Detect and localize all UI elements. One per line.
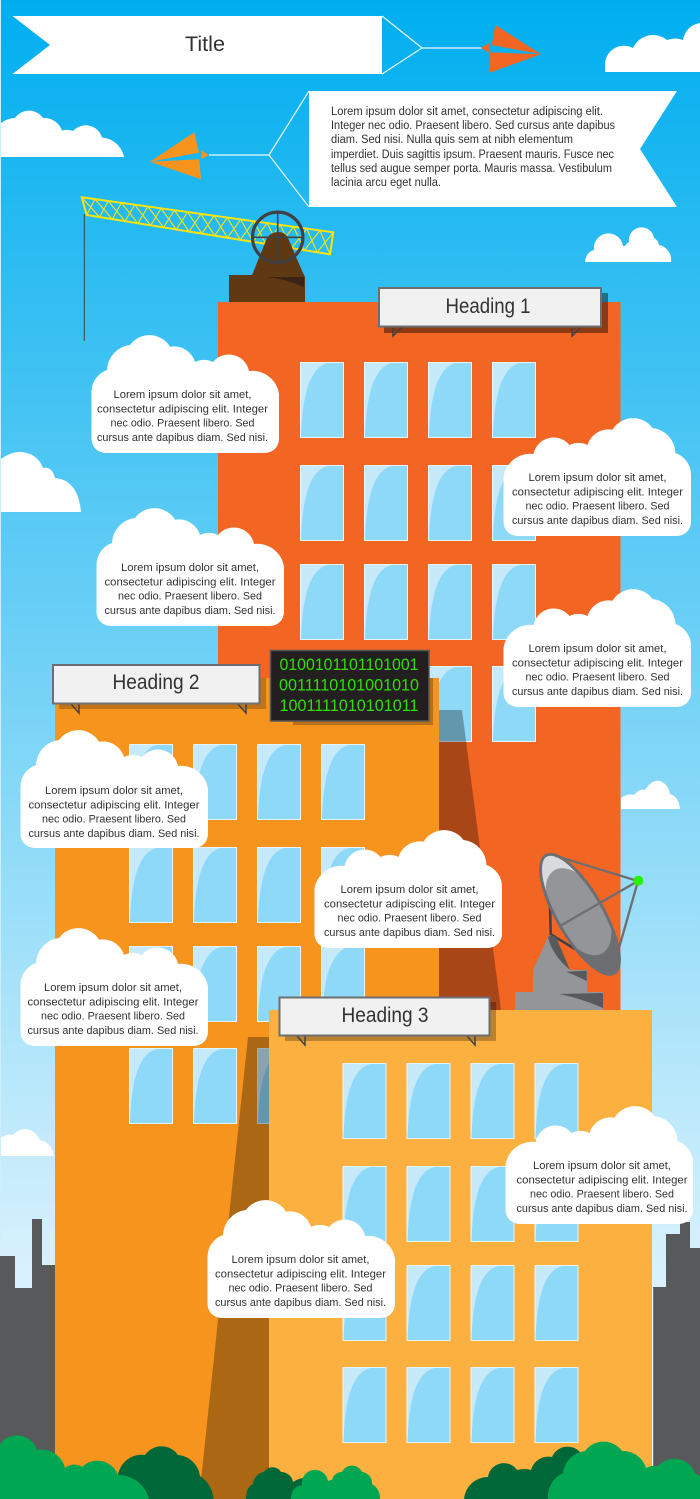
callout cloud 7 xyxy=(20,928,208,1046)
building 3 windows xyxy=(343,1064,578,1442)
cabin shading xyxy=(267,277,304,287)
intro banner tow lines xyxy=(209,91,309,207)
building 2 windows xyxy=(130,744,364,1124)
callout cloud 5: nec odio. Praesent libero. Sed xyxy=(42,814,186,826)
callout cloud 9: Lorem ipsum dolor sit amet, xyxy=(232,1254,370,1266)
callout cloud 7: nec odio. Praesent libero. Sed xyxy=(41,1010,185,1022)
building 2 xyxy=(55,678,439,1499)
crane wheel xyxy=(252,211,304,263)
intro text xyxy=(331,106,615,189)
heading 1 label xyxy=(379,288,608,336)
icon: yellow paper plane left xyxy=(150,132,209,179)
callout cloud 7: Lorem ipsum dolor sit amet, xyxy=(44,982,182,994)
title text: Title xyxy=(185,33,225,56)
skyline: left towers xyxy=(0,1219,56,1499)
callout cloud 1: consectetur adipiscing elit. Integer xyxy=(97,403,268,415)
building 1 windows xyxy=(300,362,536,742)
building 1 xyxy=(218,302,620,1010)
base shading xyxy=(548,936,603,1008)
callout cloud 8 xyxy=(506,1106,693,1224)
callout cloud 1 xyxy=(91,335,279,453)
callout cloud 1: nec odio. Praesent libero. Sed xyxy=(110,418,254,430)
callout cloud 9: cursus ante dapibus diam. Sed nisi. xyxy=(215,1297,386,1309)
crane cable xyxy=(83,214,85,341)
dish support arms xyxy=(550,905,575,949)
callout cloud 3: consectetur adipiscing elit. Integer xyxy=(104,576,276,588)
callout cloud 7: consectetur adipiscing elit. Integer xyxy=(28,996,199,1008)
callout cloud 8: consectetur adipiscing elit. Integer xyxy=(516,1174,688,1186)
feed struts xyxy=(555,856,638,952)
callout cloud 6: Lorem ipsum dolor sit amet, xyxy=(340,884,478,896)
crane cabin xyxy=(229,232,305,302)
callout cloud 1: Lorem ipsum dolor sit amet, xyxy=(114,389,252,401)
intro text: Integer nec odio. Praesent libero. Sed cursus ante dapibus xyxy=(331,120,615,132)
intro text: imperdiet. Duis sagittis ipsum. Praesent mauris. Fusce nec xyxy=(331,149,614,161)
callout cloud 4: consectetur adipiscing elit. Integer xyxy=(512,657,683,669)
shadow of building 3 on building 2 xyxy=(199,1037,269,1499)
shadow of building 2 on building 1 xyxy=(439,710,501,1010)
callout cloud 2: consectetur adipiscing elit. Integer xyxy=(512,486,683,498)
callout cloud 4: Lorem ipsum dolor sit amet, xyxy=(528,643,666,655)
callout cloud 6 xyxy=(314,830,502,948)
callout cloud 2 xyxy=(504,418,691,536)
binary code panel: 0011110101001010 xyxy=(279,676,419,694)
heading 1 text: Heading 1 xyxy=(446,295,530,318)
callout cloud 7: cursus ante dapibus diam. Sed nisi. xyxy=(28,1025,198,1037)
callout cloud 3: Lorem ipsum dolor sit amet, xyxy=(121,562,259,574)
callout cloud 4: cursus ante dapibus diam. Sed nisi. xyxy=(512,686,683,698)
intro text: diam. Sed nisi. Nulla quis sem at nibh elementum xyxy=(331,134,573,146)
dish bowl xyxy=(539,852,621,976)
callout cloud 5: Lorem ipsum dolor sit amet, xyxy=(45,785,183,797)
intro text: tellus sed augue semper porta. Mauris massa. Vestibulum xyxy=(331,163,612,175)
callout cloud 2: nec odio. Praesent libero. Sed xyxy=(526,500,670,512)
callout cloud 6: nec odio. Praesent libero. Sed xyxy=(338,912,482,924)
callout cloud 8: cursus ante dapibus diam. Sed nisi. xyxy=(516,1203,688,1215)
icon: orange paper plane right xyxy=(481,25,541,73)
heading 2 label xyxy=(53,665,266,713)
binary digits: 0100101101101001 xyxy=(280,656,418,674)
callout cloud 3: nec odio. Praesent libero. Sed xyxy=(118,590,262,602)
crane boom xyxy=(82,197,333,254)
dish base xyxy=(515,935,603,1010)
callout cloud 6: consectetur adipiscing elit. Integer xyxy=(324,898,495,910)
intro banner xyxy=(209,91,677,207)
callout cloud 2: cursus ante dapibus diam. Sed nisi. xyxy=(512,515,683,527)
callout cloud 4 xyxy=(504,589,691,707)
callout cloud 3: cursus ante dapibus diam. Sed nisi. xyxy=(104,605,276,617)
callout cloud 4: nec odio. Praesent libero. Sed xyxy=(526,672,670,684)
skyline: right towers xyxy=(653,1222,700,1499)
heading 2 text: Heading 2 xyxy=(112,671,200,694)
trees: right dark bush xyxy=(464,1447,590,1499)
intro text: lacinia arcu eget nulla. xyxy=(331,177,441,189)
callout cloud 8: Lorem ipsum dolor sit amet, xyxy=(533,1160,671,1172)
background clouds xyxy=(1,23,700,1156)
callout cloud 9 xyxy=(207,1200,395,1318)
trees: left light bush xyxy=(0,1435,149,1499)
trees: middle light bush xyxy=(291,1466,380,1499)
callout cloud 9: consectetur adipiscing elit. Integer xyxy=(215,1268,386,1280)
heading 3 text: Heading 3 xyxy=(342,1004,428,1027)
callout cloud 5 xyxy=(20,730,208,848)
callout cloud 8: nec odio. Praesent libero. Sed xyxy=(530,1188,674,1200)
callout cloud 3 xyxy=(96,508,284,626)
crane xyxy=(82,197,333,341)
binary code panel: 1001111010101011 xyxy=(280,697,418,715)
trees: left dark bush xyxy=(118,1446,214,1499)
banner tow lines xyxy=(382,16,482,74)
callout cloud 5: consectetur adipiscing elit. Integer xyxy=(28,799,200,811)
callout cloud 1: cursus ante dapibus diam. Sed nisi. xyxy=(97,432,268,444)
trees: middle dark bush xyxy=(246,1467,310,1499)
heading 3 label xyxy=(280,998,496,1045)
intro text: Lorem ipsum dolor sit amet, consectetur adipiscing elit. xyxy=(331,106,603,118)
trees: right light bush xyxy=(548,1442,700,1499)
binary code panel xyxy=(270,650,433,725)
callout cloud 9: nec odio. Praesent libero. Sed xyxy=(228,1282,372,1294)
callout cloud 2: Lorem ipsum dolor sit amet, xyxy=(528,472,666,484)
satellite dish xyxy=(515,841,643,1010)
building 3 xyxy=(269,1010,653,1499)
callout cloud 5: cursus ante dapibus diam. Sed nisi. xyxy=(28,828,200,840)
green receiver dot xyxy=(633,876,643,886)
callout cloud 6: cursus ante dapibus diam. Sed nisi. xyxy=(324,927,495,939)
title banner xyxy=(12,16,482,74)
